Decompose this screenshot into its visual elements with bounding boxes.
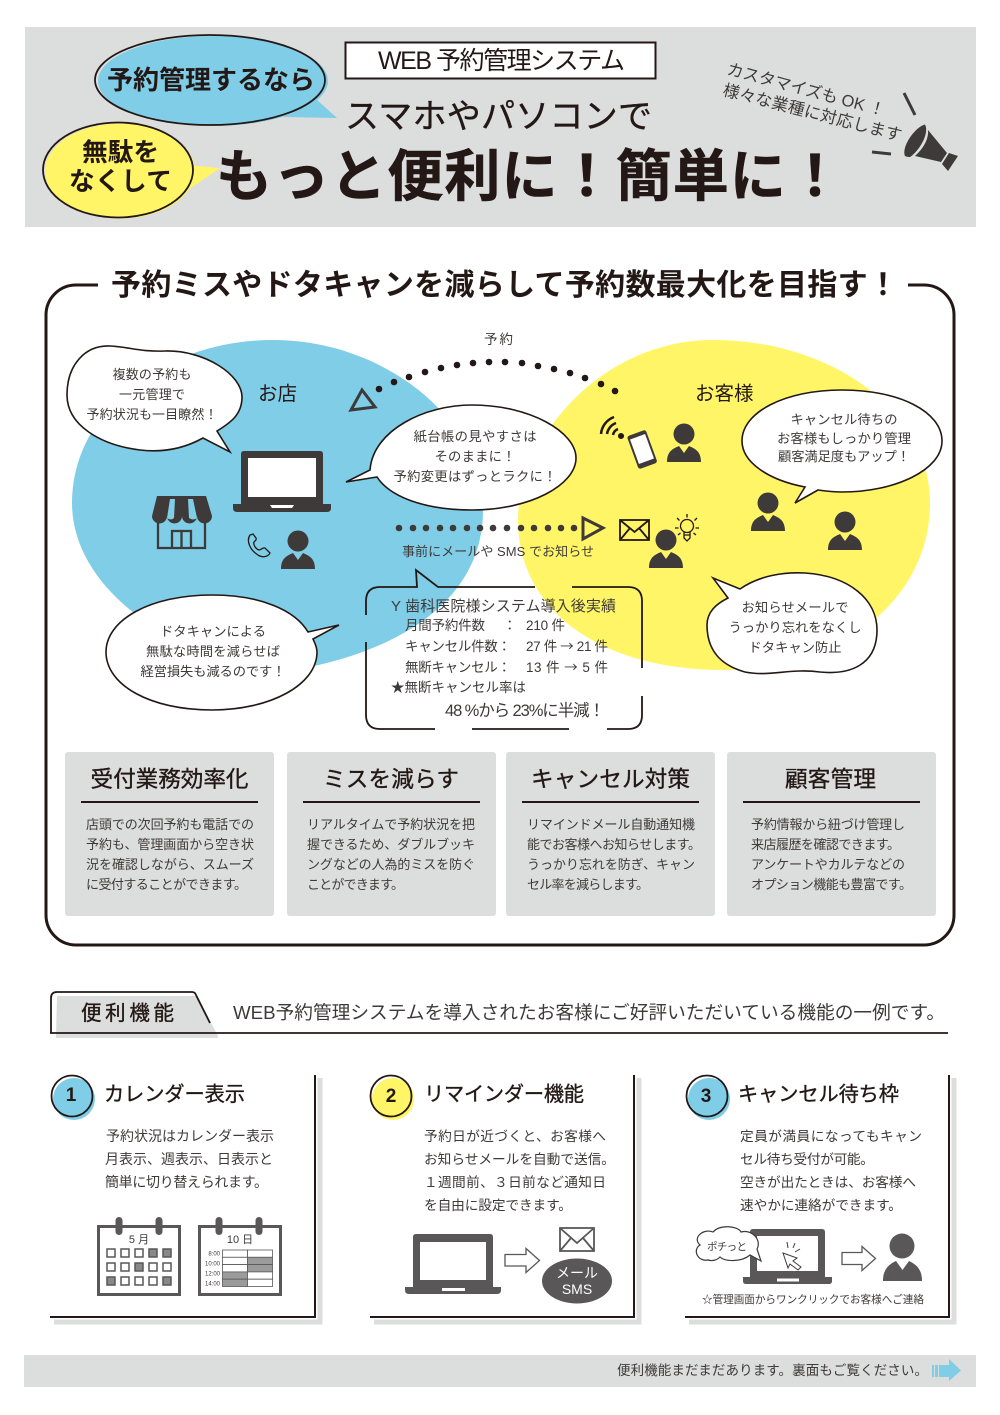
- icon: month calendar: [98, 1217, 180, 1294]
- benefit card: cancellation measures: キャンセル対策: [531, 767, 690, 792]
- number badge 3: [686, 1076, 730, 1120]
- icon: laptop: [233, 451, 331, 512]
- benefit card: reception efficiency: 況を確認しながら、スムーズ: [86, 857, 254, 872]
- footer band: [24, 1355, 976, 1387]
- callout: reminder mail: うっかり忘れをなくし: [728, 620, 862, 635]
- icon: day calendar: 8:00: [208, 1252, 221, 1258]
- callout: waitlist: [742, 390, 942, 503]
- results box: 13 件 → 5 件: [526, 656, 608, 676]
- icon: customer: [883, 1234, 922, 1281]
- description: １週間前、３日前など通知日: [424, 1174, 606, 1190]
- callout: waitlist: お客様もしっかり管理: [777, 431, 911, 446]
- icon: store: [152, 496, 212, 548]
- icon: envelope: [620, 520, 649, 540]
- icon: next-page arrow: [932, 1359, 961, 1381]
- description: 予約状況はカレンダー表示: [106, 1128, 274, 1144]
- icon: megaphone: [872, 93, 958, 171]
- benefit card: cancellation measures: 能でお客様へお知らせします。: [527, 837, 701, 852]
- subtitle: スマホやパソコンで: [345, 98, 652, 136]
- description: 簡単に切り替えられます。: [105, 1174, 268, 1190]
- results box: 無断キャンセル：: [405, 660, 511, 675]
- benefit card: reduce mistakes: 握できるため、ダブルブッキ: [307, 837, 475, 852]
- icon: day calendar: 10:00: [205, 1262, 221, 1268]
- results box: 48 %から 23%に半減！: [445, 701, 605, 720]
- benefit card: customer management: 予約情報から紐づけ管理し: [751, 817, 905, 832]
- callout: waitlist: 顧客満足度もアップ！: [778, 449, 910, 464]
- mail and SMS badge: [542, 1258, 612, 1304]
- icon: day calendar: 14:00: [205, 1282, 221, 1288]
- callout: consolidated management: 予約状況も一目瞭然！: [86, 407, 218, 422]
- arrow: [505, 1248, 540, 1272]
- blue speech bubble: [95, 35, 337, 126]
- benefit card: customer management: 来店履歴を確認できます。: [751, 837, 900, 852]
- number badge 3: 3: [701, 1086, 711, 1107]
- callout: paper ledger: 紙台帳の見やすさは: [414, 429, 536, 444]
- main title: もっと便利に！簡単に！: [216, 145, 843, 208]
- icon: customer 3: [828, 512, 862, 550]
- footer band: 便利機能まだまだあります。裏面もご覧ください。: [617, 1363, 928, 1378]
- benefit card: customer management: アンケートやカルテなどの: [751, 857, 905, 872]
- title: カレンダー表示: [104, 1083, 245, 1106]
- arrow: [842, 1246, 876, 1270]
- cloud callout: [696, 1227, 761, 1261]
- description: 月表示、週表示、日表示と: [105, 1151, 273, 1167]
- feature card 3: waitlist: [685, 1075, 954, 1322]
- description: [740, 1129, 922, 1213]
- yellow speech bubble: [43, 122, 220, 218]
- callout: consolidated management: 複数の予約も: [112, 367, 192, 382]
- description: 速やかに連絡ができます。: [740, 1198, 902, 1213]
- tilted customization note: カスタマイズも OK ！: [725, 60, 887, 120]
- number badge 1: 1: [66, 1085, 77, 1106]
- icon: staff person: [281, 530, 315, 569]
- label: shop: お店: [258, 383, 297, 405]
- callout: paper ledger: [346, 405, 576, 510]
- benefit card: reception efficiency: 予約も、管理画面から空き状: [86, 837, 254, 852]
- callout: paper ledger: 予約変更はずっとラクに！: [394, 469, 556, 484]
- number badge 1: [52, 1076, 95, 1120]
- description: 予約日が近づくと、お客様へ: [424, 1128, 606, 1144]
- results box: 月間予約件数: [405, 618, 486, 633]
- yellow speech bubble: なくして: [69, 168, 172, 196]
- cloud callout: ポチっと: [707, 1241, 747, 1253]
- title: キャンセル待ち枠: [738, 1083, 899, 1106]
- label: reservation: 予約: [484, 332, 513, 347]
- callout: paper ledger: そのままに！: [434, 449, 516, 464]
- benefit card: cancellation measures: [506, 752, 715, 916]
- callout: reminder mail: ドタキャン防止: [748, 640, 842, 655]
- title: リマインダー機能: [424, 1083, 584, 1106]
- icon: customer 1: [667, 424, 701, 462]
- benefit card: customer management: 顧客管理: [785, 767, 876, 792]
- blue blob: shop: [72, 340, 483, 669]
- benefit card: cancellation measures: リマインドメール自動通知機: [527, 817, 695, 832]
- feature card 2: reminder: [370, 1075, 639, 1322]
- icon: customer 4: [649, 530, 683, 568]
- description: [424, 1128, 615, 1213]
- number badge 2: [370, 1076, 414, 1120]
- benefit card: cancellation measures: セル率を減らします。: [527, 877, 649, 892]
- callout: no-show cost: 無駄な時間を減らせば: [146, 643, 280, 659]
- benefit card: reception efficiency: 受付業務効率化: [90, 767, 248, 792]
- icon: wifi: [601, 417, 623, 438]
- product name box: [346, 42, 656, 78]
- callout: consolidated management: [67, 346, 242, 452]
- panel heading: 予約ミスやドタキャンを減らして予約数最大化を目指す！: [111, 269, 898, 302]
- icon: laptop with cursor: [743, 1229, 832, 1284]
- yellow speech bubble: 無駄を: [82, 138, 159, 167]
- product name box: WEB 予約管理システム: [378, 47, 625, 75]
- description: 空きが出たときは、お客様へ: [740, 1174, 916, 1190]
- results box: ★無断キャンセル率は: [391, 680, 526, 695]
- label: customers: お客様: [695, 383, 754, 405]
- feature card 1: calendar: [50, 1075, 320, 1322]
- description: [105, 1128, 274, 1190]
- icon: envelope: [560, 1228, 594, 1251]
- benefit card: reduce mistakes: リアルタイムで予約状況を把: [307, 817, 475, 832]
- icon: day calendar: 12:00: [205, 1272, 221, 1278]
- mail and SMS badge: SMS: [562, 1281, 592, 1297]
- features section header: WEB予約管理システムを導入されたお客様にご好評いただいている機能の一例です。: [233, 1002, 945, 1023]
- blue speech bubble: 予約管理するなら: [107, 65, 315, 95]
- notification caption: 事前にメールや SMS でお知らせ: [402, 544, 594, 559]
- benefit card: customer management: [727, 752, 936, 916]
- description: お知らせメールを自動で送信。: [424, 1151, 615, 1167]
- yellow blob: customers: [518, 340, 930, 670]
- icon: day calendar: [200, 1217, 280, 1294]
- benefit card: reception efficiency: に受付することができます。: [86, 877, 247, 892]
- results box: キャンセル件数：: [405, 639, 511, 654]
- icon: day calendar: 10 日: [227, 1234, 253, 1246]
- header band: [25, 27, 976, 227]
- features section header: 便利機能: [81, 1002, 174, 1025]
- caption: ☆管理画面からワンクリックでお客様へご連絡: [702, 1293, 924, 1306]
- mail and SMS badge: メール: [556, 1265, 598, 1281]
- icon: smartphone: [627, 430, 658, 469]
- callout: no-show cost: ドタキャンによる: [160, 624, 266, 639]
- results box: Y 歯科医院様システム導入後実績: [391, 598, 616, 615]
- benefit card: reception efficiency: 店頭での次回予約も電話での: [86, 817, 254, 832]
- benefit card: cancellation measures: うっかり忘れを防ぎ、キャン: [527, 857, 695, 872]
- benefit card: reduce mistakes: [287, 752, 496, 916]
- callout: no-show cost: [106, 595, 339, 710]
- reservation dotted arrow: [351, 359, 618, 410]
- tilted customization note: 様々な業種に対応します: [721, 80, 904, 145]
- panel: reservation improvement: [46, 269, 954, 945]
- callout: no-show cost: 経営損失も減るのです！: [140, 663, 286, 679]
- callout: waitlist: キャンセル待ちの: [790, 412, 898, 427]
- callout: reminder mail: お知らせメールで: [742, 599, 848, 615]
- callout: reminder mail: [707, 573, 877, 674]
- features section header: [50, 992, 948, 1038]
- benefit card: reduce mistakes: ングなどの人為的ミスを防ぐ: [307, 857, 475, 872]
- description: 定員が満員になってもキャン: [740, 1129, 922, 1144]
- benefit card: reception efficiency: [65, 752, 274, 916]
- description: セル待ち受付が可能。: [740, 1152, 874, 1167]
- callout: consolidated management: 一元管理で: [119, 387, 185, 402]
- results box: [366, 570, 642, 729]
- benefit card: reduce mistakes: ことができます。: [307, 877, 404, 892]
- icon: telephone: [248, 534, 270, 557]
- icon: laptop: [405, 1234, 501, 1294]
- results box: ：: [503, 618, 516, 633]
- results box: 27 件 → 21 件: [526, 635, 608, 655]
- icon: month calendar: 5 月: [129, 1234, 149, 1246]
- notification dotted arrow: [396, 518, 603, 539]
- icon: light bulb: [675, 514, 699, 541]
- number badge 2: 2: [386, 1086, 396, 1107]
- icon: customer 2: [751, 492, 785, 531]
- benefit card: customer management: オプション機能も豊富です。: [751, 877, 912, 892]
- benefit card: reduce mistakes: ミスを減らす: [323, 767, 459, 792]
- description: を自由に設定できます。: [424, 1198, 572, 1213]
- results box: 210 件: [526, 618, 565, 633]
